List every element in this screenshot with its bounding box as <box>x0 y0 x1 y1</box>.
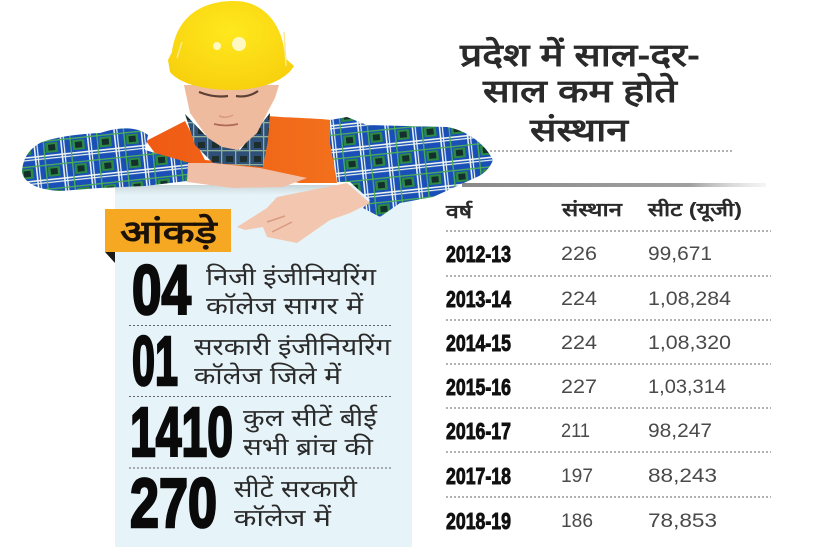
table: institutes and seats by year: 1,03,314 <box>648 377 726 398</box>
stat: 1410 total seats <box>130 393 378 471</box>
face <box>184 85 279 150</box>
stat: 270 government seats: सीटें सरकारी <box>234 475 358 503</box>
illustration: construction worker leaning over the panel <box>22 1 493 243</box>
title <box>459 36 700 148</box>
table: institutes and seats by year: 1,08,284 <box>648 289 731 310</box>
right sleeve <box>330 117 493 217</box>
title: संस्थान <box>529 112 630 148</box>
stat: 1410 total seats: 1410 <box>130 393 233 471</box>
collar and shirt <box>185 113 270 167</box>
table: institutes and seats by year: 2016-17 <box>446 418 511 444</box>
table: institutes and seats by year: 78,853 <box>648 511 717 532</box>
table: institutes and seats by year: 224 <box>561 333 597 354</box>
table: institutes and seats by year: 224 <box>561 289 597 310</box>
callout tag: आंकड़े: आंकड़े <box>120 213 218 250</box>
stat: 1410 total seats: सभी ब्रांच की <box>243 433 374 461</box>
table header: संस्थान <box>561 199 624 221</box>
stat: 01 government college: सरकारी इंजीनियरिंग <box>194 333 392 361</box>
left hand <box>187 163 307 188</box>
title: प्रदेश में साल-दर- <box>459 36 700 73</box>
stat: 04 private colleges: निजी इंजीनियरिंग <box>206 263 377 291</box>
table: institutes and seats by year: 226 <box>561 244 597 265</box>
table header <box>445 198 742 223</box>
callout tag: आंकड़े <box>105 209 231 263</box>
stat: 270 government seats <box>130 464 358 542</box>
table: institutes and seats by year: 227 <box>561 377 597 398</box>
table: institutes and seats by year: 186 <box>561 511 593 532</box>
table: institutes and seats by year: 99,671 <box>648 244 712 265</box>
table header: सीट (यूजी) <box>647 198 742 222</box>
table: institutes and seats by year: 2018-19 <box>446 508 511 534</box>
table: institutes and seats by year <box>445 198 771 534</box>
stat: 04 private colleges: कॉलेज सागर में <box>206 292 364 320</box>
stat: 1410 total seats: कुल सीटें बीई <box>243 404 378 433</box>
table: institutes and seats by year: 98,247 <box>648 421 712 442</box>
stat: 01 government college <box>132 322 392 400</box>
stat: 04 private colleges <box>132 251 377 329</box>
table: institutes and seats by year: 2015-16 <box>446 374 511 400</box>
stat: 270 government seats: 270 <box>130 464 217 542</box>
table: institutes and seats by year: 2013-14 <box>446 286 511 312</box>
table: institutes and seats by year: 1,08,320 <box>648 333 731 354</box>
panel: statistics background <box>115 185 412 547</box>
table: institutes and seats by year: 2014-15 <box>446 330 511 356</box>
table: institutes and seats by year: 197 <box>561 466 593 487</box>
stat: 04 private colleges: 04 <box>132 251 191 329</box>
table: institutes and seats by year: 211 <box>561 421 590 442</box>
stat: 270 government seats: कॉलेज में <box>234 504 332 532</box>
stat: 01 government college: 01 <box>132 322 178 400</box>
vest <box>146 116 337 183</box>
table: institutes and seats by year: 2017-18 <box>446 463 511 489</box>
table header: वर्ष <box>445 200 473 223</box>
title: साल कम होते <box>482 72 679 109</box>
left sleeve <box>22 128 190 191</box>
right hand <box>237 183 370 243</box>
stat: 01 government college: कॉलेज जिले में <box>194 362 342 390</box>
table: institutes and seats by year: 2012-13 <box>446 241 511 267</box>
hard hat <box>168 1 294 90</box>
table: institutes and seats by year: 88,243 <box>648 466 717 487</box>
